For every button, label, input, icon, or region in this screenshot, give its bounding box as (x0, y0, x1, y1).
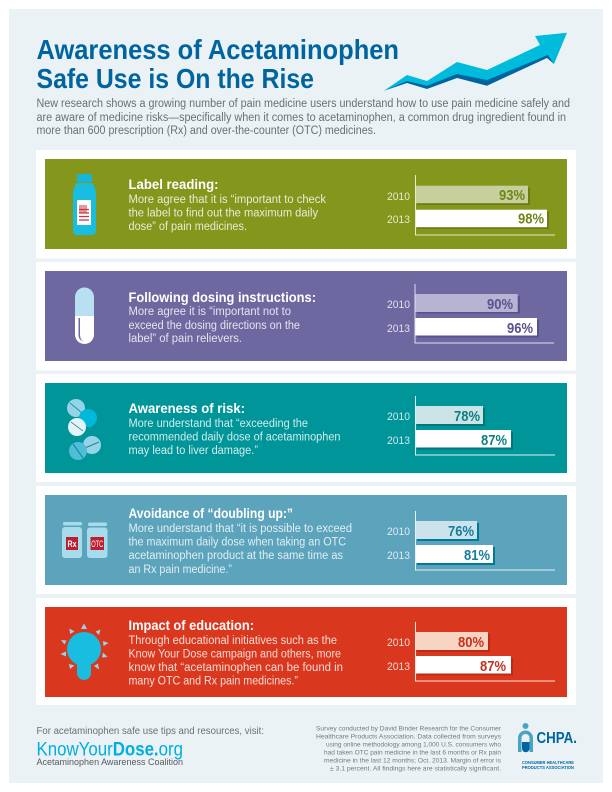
title: Safe Use is On the Rise (36, 63, 314, 94)
icon: Rx and OTC bottles: Rx (68, 539, 77, 550)
bar chart: following dosing instructions: 2010 (387, 299, 410, 311)
text: awareness of risk (128, 400, 340, 457)
intro text: more than 600 prescription (Rx) and over-the-counter (OTC) medicines. (36, 125, 376, 137)
text: impact of education: Through educational initiatives such as the (128, 635, 337, 647)
icon: rising arrow (384, 33, 567, 91)
bar chart: following dosing instructions: 2013 (387, 323, 410, 335)
bar chart: awareness of risk: 87% (481, 432, 507, 449)
bar chart: impact of education: 80% (458, 634, 484, 651)
title: Awareness of Acetaminophen (36, 34, 399, 65)
icon: medicine bottle (73, 174, 96, 235)
logo: CHPA: PRODUCTS ASSOCIATION (522, 765, 574, 770)
bar chart: label reading: 2013 (387, 214, 410, 226)
text: following dosing instructions: Following dosing instructions: (128, 289, 316, 305)
bar chart: label reading: 2010 (387, 191, 410, 203)
text: following dosing instructions (128, 289, 316, 345)
text: awareness of risk: More understand that “exceeding the (128, 418, 308, 430)
title (36, 34, 399, 94)
text: avoidance of doubling up: an Rx pain medicine.” (128, 564, 232, 576)
footer: survey methodology (316, 726, 502, 772)
panel: awareness of risk (36, 374, 576, 482)
footer: resources link: KnowYourDose.org (36, 738, 183, 760)
bar chart: awareness of risk: 2013 (387, 435, 410, 447)
bar chart: impact of education: 87% (480, 658, 506, 675)
bar chart: avoidance of doubling up (387, 511, 555, 570)
footer: resources link: For acetaminophen safe use tips and resources, visit: (36, 725, 264, 737)
footer: resources link: Acetaminophen Awareness Coalition (36, 757, 183, 768)
footer: survey methodology: using online methodology among 1,000 U.S. consumers who (326, 742, 501, 748)
bar chart: avoidance of doubling up: 2010 (387, 526, 410, 538)
bar chart: label reading (387, 175, 555, 235)
text: avoidance of doubling up (128, 505, 352, 576)
bar chart: impact of education: 2010 (387, 637, 410, 649)
logo: CHPA (518, 723, 577, 770)
text: avoidance of doubling up: acetaminophen product at the same time as (128, 550, 343, 562)
text: avoidance of doubling up: Avoidance of “doubling up:” (128, 505, 293, 521)
footer: survey methodology: ± 3.1 percent. All findings here are statistically significant. (330, 766, 501, 772)
panel: label reading (36, 150, 576, 258)
text: label reading: the label to find out the maximum daily (128, 208, 318, 220)
text: following dosing instructions: More agree it is “important not to (128, 306, 291, 318)
bar chart: following dosing instructions (387, 284, 554, 343)
logo: CHPA: CONSUMER HEALTHCARE (522, 760, 574, 765)
text: label reading: Label reading: (128, 176, 218, 192)
text: awareness of risk: Awareness of risk: (128, 400, 245, 416)
icon: pills (67, 399, 101, 460)
icon: Rx and OTC bottles: OTC (91, 539, 104, 549)
icon: light bulb (60, 624, 108, 680)
footer: survey methodology: Healthcare Products Association. Data collected from surveys (316, 734, 502, 740)
text: awareness of risk: recommended daily dose of acetaminophen (128, 432, 340, 444)
intro text: New research shows a growing number of pain medicine users understand how to use pain medicine safely and (36, 98, 570, 110)
bar chart: awareness of risk: 2010 (387, 411, 410, 423)
text: impact of education: many OTC and Rx pain medicines.” (128, 676, 298, 688)
bar chart: label reading: 98% (518, 210, 544, 228)
bar chart: awareness of risk (387, 396, 555, 455)
text: avoidance of doubling up: the maximum daily dose when taking an OTC (128, 536, 346, 548)
text: impact of education: Impact of education: (128, 617, 254, 633)
intro text (36, 98, 570, 137)
footer: resources link (36, 725, 264, 768)
footer: survey methodology: Survey conducted by David Binder Research for the Consumer (316, 726, 502, 732)
text: impact of education: know that “acetaminophen can be found in (128, 662, 343, 674)
icon: capsule (75, 288, 94, 344)
text: label reading: dose” of pain medicines. (128, 221, 247, 233)
footer: survey methodology: medicine in the last 12 months; Oct. 2013. Margin of error is (324, 758, 502, 764)
text: following dosing instructions: label” of pain relievers. (128, 333, 242, 345)
text: impact of education (128, 617, 343, 688)
text: label reading (128, 176, 326, 233)
bar chart: avoidance of doubling up: 2013 (387, 550, 410, 562)
bar chart: awareness of risk: 78% (454, 408, 480, 425)
intro text: are aware of medicine risks—specifically when it comes to acetaminophen, a common drug ingredient found in (36, 112, 566, 124)
text: following dosing instructions: exceed the dosing directions on the (128, 320, 300, 332)
text: label reading: More agree that it is “important to check (128, 194, 326, 206)
bar chart: avoidance of doubling up: 81% (464, 547, 490, 564)
bar chart: following dosing instructions: 90% (487, 296, 513, 313)
logo: CHPA: CHPA. (536, 730, 577, 747)
bar chart: label reading: 93% (499, 187, 525, 204)
bar chart: avoidance of doubling up: 76% (448, 523, 474, 540)
text: impact of education: Know Your Dose campaign and others, more (128, 648, 341, 660)
text: awareness of risk: may lead to liver damage.” (128, 445, 258, 457)
icon: Rx and OTC bottles (62, 522, 108, 558)
bar chart: impact of education: 2013 (387, 661, 410, 673)
text: avoidance of doubling up: More understand that “it is possible to exceed (128, 523, 352, 535)
panel: impact of education (36, 598, 576, 705)
footer: survey methodology: had taken OTC pain medicine in the last 6 months or Rx pain (324, 750, 501, 756)
bar chart: impact of education (387, 622, 555, 681)
panel: following dosing instructions (36, 262, 576, 370)
panel: avoidance of doubling up (36, 486, 576, 594)
bar chart: following dosing instructions: 96% (507, 320, 533, 337)
